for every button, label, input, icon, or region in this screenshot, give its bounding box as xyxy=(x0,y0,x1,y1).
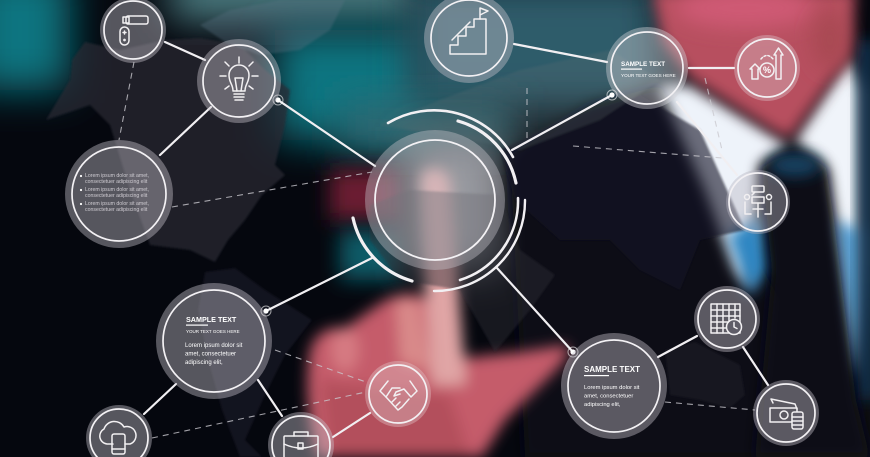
node: percent growth: % xyxy=(763,65,771,75)
node: meeting xyxy=(726,170,790,234)
node: percent growth xyxy=(734,35,800,101)
node: sample text right: Lorem ipsum dolor sit xyxy=(584,385,640,391)
node: calendar and clock xyxy=(694,286,760,352)
node: bullet list panel xyxy=(65,140,173,248)
node: sample text left: YOUR TEXT GOES HERE xyxy=(186,329,240,334)
shirt xyxy=(658,85,788,290)
hand xyxy=(307,168,568,457)
node: sample text right: adipiscing elit, xyxy=(584,402,621,408)
node: usb drive xyxy=(100,0,166,63)
node: sample text left xyxy=(156,283,272,399)
node: sample text right: amet, consectetuer xyxy=(584,394,633,400)
node: bullet list panel: consectetuer adipiscing elit xyxy=(85,193,148,199)
node: sample text top right: YOUR TEXT GOES HERE xyxy=(621,73,676,78)
node: stairs with flag xyxy=(424,0,514,83)
node: bullet list panel: Lorem ipsum dolor sit amet, xyxy=(85,173,149,179)
node: light bulb xyxy=(197,39,281,123)
central hub xyxy=(353,110,525,291)
node: bullet list panel: consectetuer adipiscing elit xyxy=(85,179,148,185)
connector dots xyxy=(261,90,617,357)
node: sample text right xyxy=(561,333,667,439)
face xyxy=(652,0,856,138)
node: sample text left: Lorem ipsum dolor sit xyxy=(185,343,243,349)
node: cloud and phone xyxy=(86,405,152,457)
dashed connector lines xyxy=(119,62,755,438)
node: sample text top right xyxy=(606,27,688,109)
tie xyxy=(755,155,870,457)
node: sample text top right: SAMPLE TEXT xyxy=(621,61,665,68)
suit xyxy=(510,85,870,457)
node: sample text left: SAMPLE TEXT xyxy=(186,315,237,324)
node: bullet list panel: Lorem ipsum dolor sit amet, xyxy=(85,201,149,207)
node: banknotes and coins xyxy=(753,380,819,446)
solid connector lines xyxy=(144,42,768,437)
node: sample text right: SAMPLE TEXT xyxy=(584,365,640,374)
node: sample text left: amet, consectetuer xyxy=(185,352,236,358)
node: bullet list panel: consectetuer adipiscing elit xyxy=(85,207,148,213)
node: briefcase xyxy=(268,412,334,457)
node: sample text left: adipiscing elit, xyxy=(185,360,223,366)
node: bullet list panel: Lorem ipsum dolor sit amet, xyxy=(85,187,149,193)
node: handshake xyxy=(365,361,431,427)
